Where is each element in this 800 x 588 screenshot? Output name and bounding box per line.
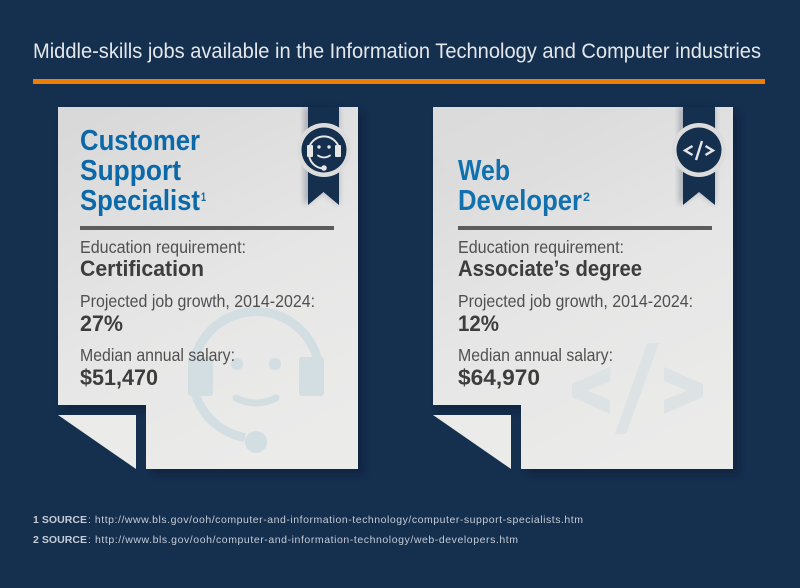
text: median salary: $64,970: [458, 365, 540, 390]
divider rule: [80, 226, 334, 230]
text: job growth: 12%: [458, 311, 499, 336]
folded corner: [58, 415, 136, 469]
icon: ribbon badge with headset: [297, 107, 351, 205]
text: job growth: [458, 291, 693, 336]
heading: Specialist: [80, 185, 200, 217]
panel: web developer: [433, 107, 738, 474]
source note 1: : http://www.bls.gov/ooh/computer-and-information-technology/computer-support-specialists.htm: [88, 514, 583, 526]
text: median salary: $51,470: [80, 365, 158, 390]
text: median salary: [80, 345, 235, 390]
icon: code watermark: [572, 343, 703, 434]
text: median salary: Median annual salary:: [458, 345, 613, 365]
orange title rule: [33, 79, 765, 84]
heading: Developer: [458, 185, 582, 217]
heading: [458, 155, 590, 217]
heading: 2: [583, 190, 590, 204]
divider rule: [458, 226, 712, 230]
heading: Customer: [80, 125, 200, 157]
text: job growth: [80, 291, 315, 336]
source note 1: 1 SOURCE: [33, 514, 87, 526]
source note 2: 2 SOURCE: [33, 534, 87, 546]
text: education requirement: Education requirement:: [80, 237, 246, 257]
folded corner: [433, 415, 511, 469]
panel: customer support specialist: [58, 107, 364, 475]
text: education requirement: [80, 237, 246, 281]
text: education requirement: Education requirement:: [458, 237, 624, 257]
icon: headset watermark: [188, 311, 324, 453]
text: job growth: Projected job growth, 2014-2024:: [80, 291, 315, 311]
title: Middle-skills jobs available in the Information Technology and Computer industries: [33, 39, 761, 63]
text: median salary: Median annual salary:: [80, 345, 235, 365]
icon: ribbon badge with code symbol: [672, 107, 726, 205]
text: education requirement: [458, 237, 642, 281]
heading: 1: [201, 190, 206, 204]
faint circle texture: [430, 70, 546, 186]
heading: Web: [458, 155, 510, 187]
text: job growth: Projected job growth, 2014-2024:: [458, 291, 693, 311]
text: education requirement: Certification: [80, 256, 204, 281]
heading: [80, 125, 206, 217]
text: job growth: 27%: [80, 311, 123, 336]
heading: Support: [80, 155, 181, 187]
source note 2: : http://www.bls.gov/ooh/computer-and-information-technology/web-developers.htm: [88, 534, 518, 546]
text: education requirement: Associate’s degree: [458, 256, 642, 281]
text: median salary: [458, 345, 613, 390]
